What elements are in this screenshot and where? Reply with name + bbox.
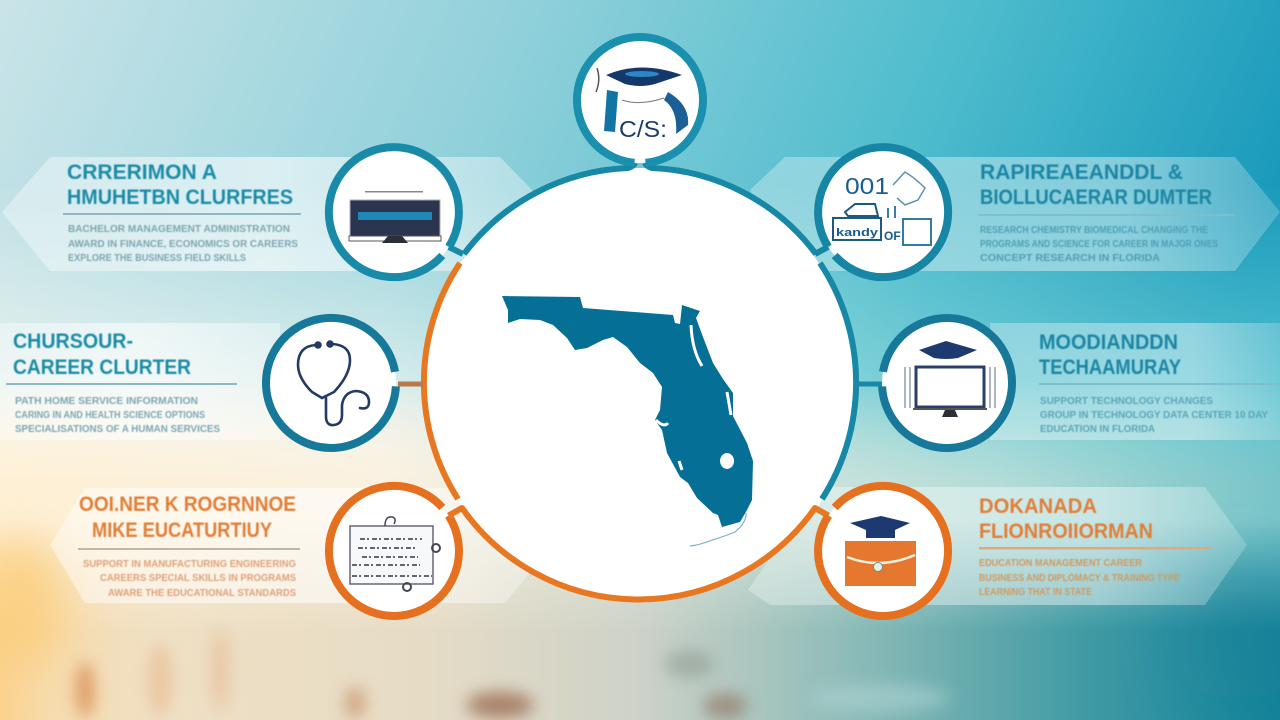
heading: MOODIANDDN <box>1039 331 1178 354</box>
body text: SUPPORT IN MANUFACTURING ENGINEERING <box>83 558 296 570</box>
icon: graduation cap <box>919 341 977 359</box>
icon circle: top left, monitor <box>329 147 463 277</box>
panel shape <box>990 323 1280 440</box>
body text: LEARNING THAT IN STATE <box>979 586 1092 598</box>
body text: CONCEPT RESEARCH IN FLORIDA <box>980 252 1160 264</box>
icon circle: middle left, stethoscope <box>266 318 396 448</box>
heading: CAREER CLURTER <box>13 356 191 379</box>
body text: BACHELOR MANAGEMENT ADMINISTRATION <box>68 223 290 235</box>
panel: top right cluster <box>750 157 1280 271</box>
icon label: C/S: <box>619 116 667 142</box>
heading: CRRERIMON A <box>67 161 217 184</box>
icon: equipment cluster <box>833 172 931 245</box>
panel shape <box>0 323 280 440</box>
connector: right <box>857 382 883 386</box>
body text: EDUCATION MANAGEMENT CAREER <box>979 557 1142 569</box>
icon: monitor <box>905 367 995 417</box>
icon circle: top, graduation <box>464 37 816 254</box>
ring segment: right teal <box>820 263 856 499</box>
body text: SUPPORT TECHNOLOGY CHANGES <box>1040 395 1213 407</box>
icon: scroll and leaves <box>596 68 688 134</box>
heading: RAPIREAEANDDL & <box>980 161 1183 184</box>
body text <box>1040 395 1268 435</box>
panel shape <box>2 157 532 271</box>
icon circle: bottom right, briefcase <box>818 486 948 616</box>
map of Florida <box>502 296 753 546</box>
body text: PROGRAMS AND SCIENCE FOR CAREER IN MAJOR ONES <box>980 238 1218 250</box>
icon: equipment cluster: 001 <box>845 173 889 199</box>
body text: BUSINESS AND DIPLOMACY & TRAINING TYPE <box>979 572 1180 584</box>
central circle with segmented ring <box>398 168 883 600</box>
body text: CAREERS SPECIAL SKILLS IN PROGRAMS <box>100 572 296 584</box>
panel shape <box>50 488 532 603</box>
body text: AWARD IN FINANCE, ECONOMICS OR CAREERS <box>68 238 298 250</box>
panel shape <box>748 487 1247 605</box>
panel shape <box>750 157 1280 271</box>
icon circle: middle right, monitor with cap <box>882 318 1012 448</box>
body text <box>979 557 1180 598</box>
icon: monitor <box>349 191 441 243</box>
heading <box>980 161 1212 209</box>
icon: graduation cap <box>850 516 910 538</box>
icon circle: bottom left, diploma <box>329 486 828 616</box>
body text <box>15 395 220 435</box>
panel: middle left cluster <box>0 323 280 440</box>
icon circle: top right, equipment cluster <box>815 147 948 277</box>
connector: left <box>398 382 423 386</box>
heading: OOI.NER K ROGRNNOE <box>79 493 296 516</box>
icon: diploma document <box>350 517 440 591</box>
island chain <box>690 513 746 546</box>
heading: HMUHETBN CLURFRES <box>67 186 293 209</box>
heading <box>979 495 1153 543</box>
heading <box>79 493 296 542</box>
ring segment: left orange <box>424 263 460 499</box>
heading: BIOLLUCAERAR DUMTER <box>980 186 1212 209</box>
ring segment: bottom orange <box>448 508 828 599</box>
inland bay details <box>656 325 731 470</box>
icon: equipment cluster: OF <box>884 229 901 243</box>
body text: PATH HOME SERVICE INFORMATION <box>15 395 198 407</box>
body text: EXPLORE THE BUSINESS FIELD SKILLS <box>68 252 246 264</box>
icon: stethoscope <box>298 342 369 425</box>
heading <box>13 330 191 379</box>
body text: RESEARCH CHEMISTRY BIOMEDICAL CHANGING THE <box>980 224 1208 236</box>
body text: CARING IN AND HEALTH SCIENCE OPTIONS <box>15 409 205 421</box>
body text <box>68 223 298 264</box>
heading: CHURSOUR- <box>13 330 133 353</box>
body text: EDUCATION IN FLORIDA <box>1040 423 1155 435</box>
body text: SPECIALISATIONS OF A HUMAN SERVICES <box>15 423 220 435</box>
icon: graduation cap <box>606 68 682 86</box>
heading <box>1039 331 1181 379</box>
icon: briefcase <box>845 541 916 586</box>
heading: DOKANADA <box>979 495 1097 518</box>
panel: bottom right cluster <box>748 487 1247 605</box>
heading <box>67 161 293 209</box>
panel: bottom left cluster <box>50 488 532 603</box>
body text <box>83 558 296 599</box>
body text: GROUP IN TECHNOLOGY DATA CENTER 10 DAY <box>1040 409 1268 421</box>
body text: AWARE THE EDUCATIONAL STANDARDS <box>108 587 296 599</box>
body text <box>980 224 1218 264</box>
heading: FLIONROIIORMAN <box>979 520 1153 543</box>
icon: equipment cluster: kandy <box>836 227 879 239</box>
panel: top left cluster <box>2 157 532 271</box>
panel: middle right cluster <box>990 323 1280 440</box>
heading: MIKE EUCATURTIUY <box>92 519 272 542</box>
heading: TECHAAMURAY <box>1039 356 1181 379</box>
